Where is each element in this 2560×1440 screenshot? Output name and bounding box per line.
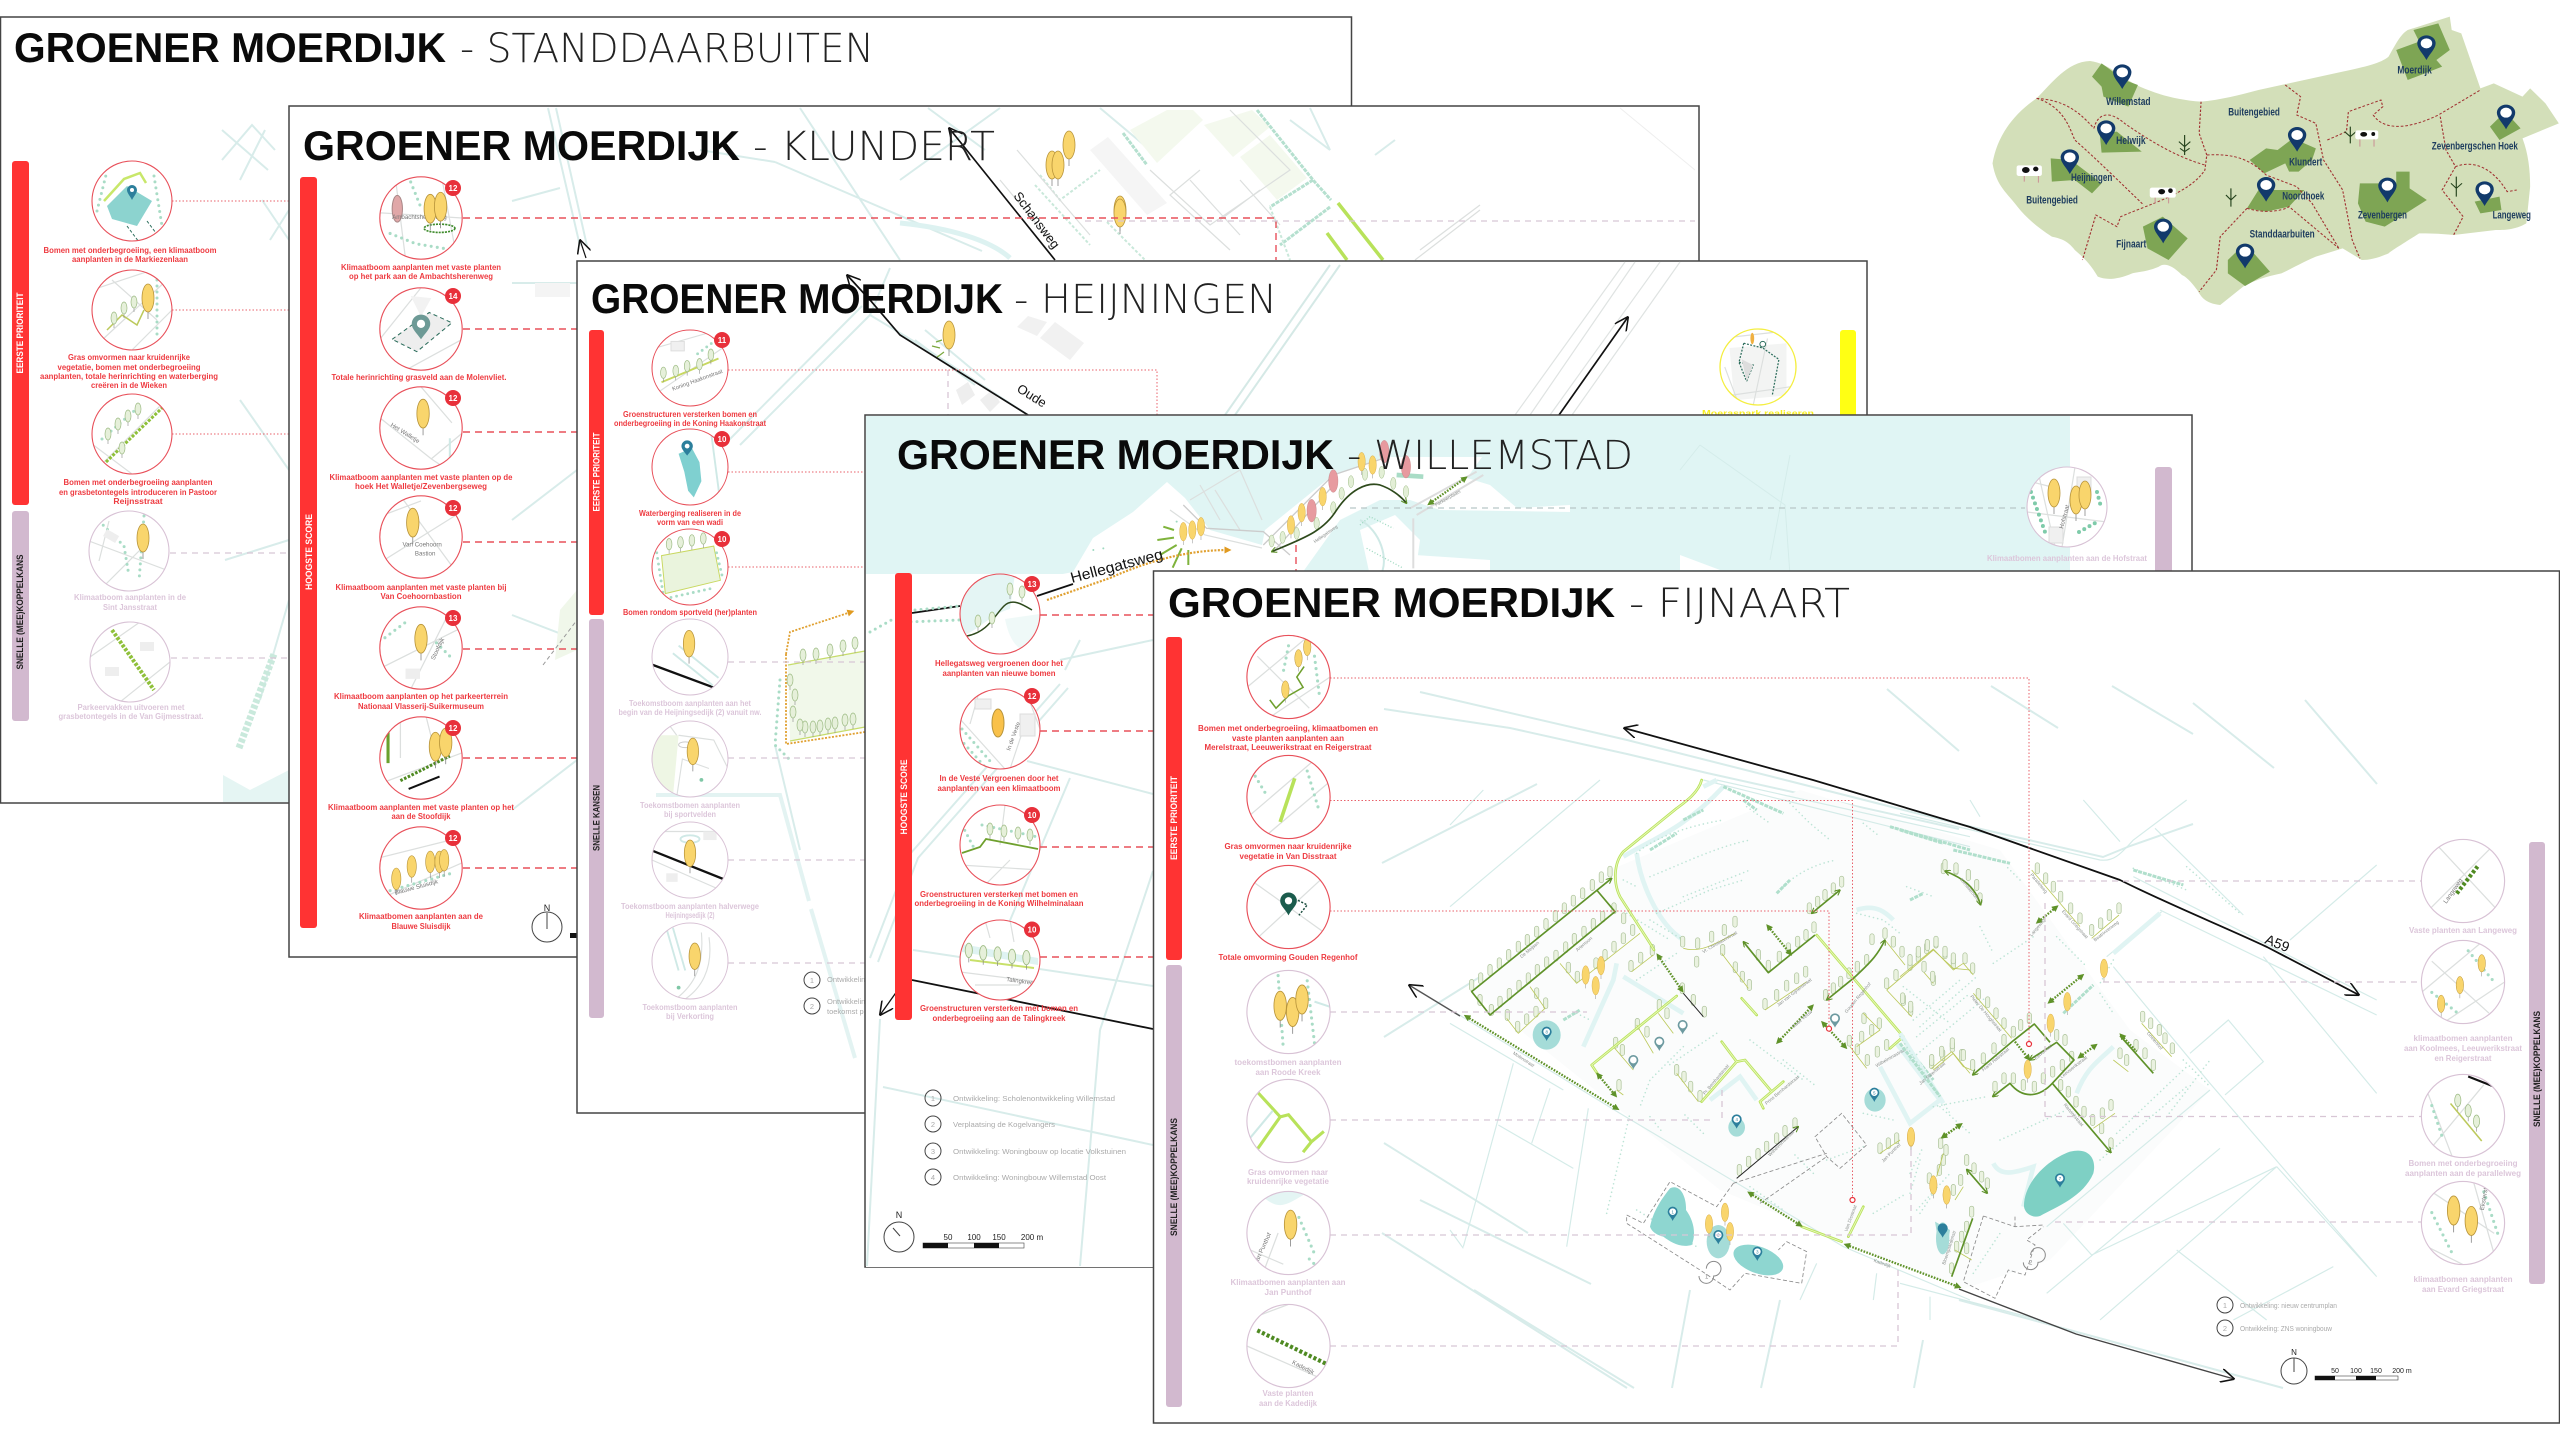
main map west: streets, greenery and trees: 6: [1941, 1228, 1944, 1233]
legend: Willemstad: Ontwikkeling: Woningbouw Willemstad Oost: [953, 1173, 1107, 1182]
legend: Heijningen: toekomst p: [827, 1007, 864, 1016]
callout: Hellegatsweg: 13: [1028, 580, 1037, 589]
main map west: streets, greenery and trees: 1: [1671, 1209, 1674, 1214]
callout: Stoofdijk: Nationaal Vlasserij-Suikermuseum: [358, 701, 484, 711]
callout: kruidenrijke vegetatie: [1247, 1079, 1330, 1186]
callout: Het Walletje: [330, 387, 513, 491]
north arrow: Fijnaart: N: [2291, 1348, 2297, 1357]
callout: de Wieken: vegetatie, bomen met onderbegroeiing: [58, 362, 200, 372]
north arrow: Willemstad: N: [896, 1210, 902, 1220]
arrow: A59 highway: A59: [2263, 931, 2292, 955]
priority bar: hoogste score: [300, 177, 317, 928]
callout: wadi: [639, 429, 741, 527]
place names: Langeweg: [2493, 208, 2531, 221]
main map west: streets, greenery and trees: [1450, 780, 1970, 1300]
priority bar: snelle koppelkansen: [12, 511, 29, 721]
priority bar: eerste prioriteit: [1166, 637, 1182, 960]
callout: Stoofdijk: Klimaatboom aanplanten op het parkeerterrein: [334, 691, 508, 701]
priority bar: yellow: [1840, 330, 1856, 420]
place names: Moerdijk: [2397, 63, 2432, 76]
scale bar: Fijnaart: [2315, 1368, 2412, 1380]
main map west: streets, greenery and trees: Van Disstraat: [1844, 1204, 1858, 1232]
priority bar: eerste prioriteit: [589, 330, 604, 615]
place names: Willemstad: [2106, 95, 2151, 108]
legend: Fijnaart: 2: [2223, 1324, 2227, 1333]
callout: Kadedijk: Kadedijk: [1291, 1359, 1316, 1377]
callout: Langeweg: Langeweg: [2442, 877, 2465, 905]
title: Fijnaart: [1168, 579, 1850, 627]
street map detail: Hellegatsweg route with trees: [1092, 440, 1483, 568]
scale bar: Willemstad: 200 m: [1021, 1233, 1043, 1242]
callout: Hofstraat: [1987, 467, 2147, 563]
callout: Blauwe Sluisdijk: Blauwe Sluisdijk: [394, 878, 440, 897]
place names: Zevenbergen: [2358, 208, 2407, 221]
callout: Talingkreek: [920, 920, 1078, 1023]
leader lines: [170, 201, 289, 658]
priority bar: eerste prioriteit: EERSTE PRIORITEIT: [1169, 776, 1179, 860]
main map east: streets, greenery and trees: [1900, 800, 2377, 1320]
arrow: Oude road: [847, 275, 1049, 415]
background map: Heijningen: [656, 262, 1680, 1058]
callout: Ambachtsherenweg: op het park aan de Ambachtsherenweg: [349, 271, 493, 281]
main map east: streets, greenery and trees: 7: [2059, 1176, 2062, 1181]
callout: Molenvliet: 14: [449, 292, 458, 301]
legend: Willemstad: 2: [931, 1120, 935, 1129]
main map east: streets, greenery and trees: Pieter De Hooghstraat: [1969, 994, 2003, 1033]
background map: Standdaarbuiten: [222, 125, 289, 802]
main map west: streets, greenery and trees: Jan van Gijnenstraat: [1776, 977, 1813, 1007]
callout: Koolmees: [2404, 940, 2522, 1063]
callout: Koolmees: aan Koolmees, Leeuwerikstraat: [2404, 1043, 2522, 1053]
callout: de Wieken: aanplanten, totale herinrichting en waterberging: [40, 371, 218, 381]
callout: yellow priority circle: [1702, 329, 1814, 418]
callout: Koning Haakonstraat: 11: [718, 336, 727, 345]
callout: Van Gijmesstraat: Parkeervakken uitvoeren met: [78, 702, 185, 712]
road with arrow: Talingkreek: [880, 980, 1153, 1029]
callout: Van Coehoorn: 12: [449, 504, 458, 513]
callout: Van Coehoorn: Van Coehoornbastion: [380, 591, 462, 601]
main map east: streets, greenery and trees: Rietvinkstraat: [2063, 1102, 2085, 1128]
legend: Heijningen: Ontwikkeling: [827, 997, 870, 1006]
location pins: [2061, 35, 2515, 268]
callout: Pastoor Reijnsstraat: Reijnsstraat: [113, 496, 163, 506]
callout: Ambachtsherenweg: Ambachtsherenweg: [392, 214, 447, 221]
place names: Standdaarbuiten: [2250, 227, 2315, 240]
leader lines: [463, 218, 1695, 868]
main map west: streets, greenery and trees: Jan Punthof: [1881, 1142, 1902, 1163]
main map east: streets, greenery and trees: Grietenhof: [2146, 1031, 2164, 1051]
callout: In de Veste: In de Veste: [1006, 721, 1022, 752]
legend: Heijningen: 1: [810, 976, 814, 985]
callout: Het Walletje: 12: [449, 394, 458, 403]
leader lines: [1330, 678, 2422, 1346]
callout: yellow priority circle: Moeraspark realiseren: [1702, 408, 1814, 418]
title: Heijningen: GROENER MOERDIJK: [591, 275, 1003, 322]
north arrow: Klundert: [532, 903, 590, 942]
callout: Evard Griegstraat: Eksterstraat: [2479, 1177, 2492, 1211]
callout: Hellegatsweg: [935, 574, 1063, 678]
main map west: streets, greenery and trees: Vr. Christiaanstraat: [1701, 930, 1739, 954]
main map east: streets, greenery and trees: Evard Griegstraat: [2061, 909, 2090, 940]
place names: Klundert: [2289, 155, 2322, 168]
arrow: Schansweg: [949, 128, 1063, 260]
callout: Merelstraat: vaste planten aanplanten aan: [1232, 733, 1344, 743]
priority bar: eerste prioriteit: EERSTE PRIORITEIT: [592, 432, 602, 512]
callout: Talingkreek: 10: [1028, 926, 1037, 934]
legend: Willemstad: Ontwikkeling: Woningbouw op locatie Volkstuinen: [953, 1147, 1126, 1156]
callout: Jan Punthof: Jan Punthof: [1253, 1232, 1273, 1265]
main map west: streets, greenery and trees: 4: [1735, 1117, 1738, 1122]
callout: Heijningsedijk halverwege: Toekomstboom aanplanten halverwege: [621, 901, 759, 911]
north arrow: Fijnaart: [2281, 1348, 2307, 1384]
legend: Heijningen: [804, 972, 870, 1016]
legend: Willemstad: 3: [931, 1147, 935, 1156]
callout: Evard Griegstraat: [2414, 1177, 2512, 1294]
callout: Het Walletje: Klimaatboom aanplanten met vaste planten op de: [330, 472, 513, 482]
callout: Evard Griegstraat: klimaatbomen aanplanten: [2414, 1274, 2512, 1284]
callout: Stoofdijk: [334, 607, 508, 711]
callout: Langeweg: Vaste planten aan Langeweg: [2409, 925, 2517, 935]
panel: Standdaarbuiten: [0, 17, 1352, 803]
callout: Van Coehoorn: Bastion: [415, 551, 436, 558]
legend: Heijningen: Ontwikkeling: [827, 975, 870, 984]
title: Fijnaart: GROENER MOERDIJK: [1168, 579, 1615, 626]
scale bar: Fijnaart: 200 m: [2392, 1368, 2412, 1375]
main map west: streets, greenery and trees: Prins Bernhardstraat: [1764, 1074, 1801, 1106]
callout: Koolmees: en Reigerstraat: [2434, 1053, 2492, 1063]
legend: Fijnaart: Ontwikkeling: nieuw centrumplan: [2240, 1301, 2337, 1310]
callout: Koning Haakonstraat: Groenstructuren versterken bomen en: [623, 409, 757, 419]
callout: Evard Griegstraat: aan Evard Griegstraat: [2422, 1284, 2504, 1294]
main map east: streets, greenery and trees: Klimaatroute: [1959, 877, 1980, 901]
callout: sportveld: [623, 529, 757, 617]
callout: kruidenrijke vegetatie: Gras omvormen naar: [1248, 1167, 1329, 1177]
place names: Noordhoek: [2282, 189, 2324, 202]
legend: Fijnaart: [2217, 1297, 2337, 1336]
scale bar: Fijnaart: 50: [2331, 1368, 2339, 1375]
callout: Langeweg: [2409, 839, 2517, 935]
priority bar: snelle koppelkansen right: [2529, 842, 2545, 1284]
callout: Van Gijmesstraat: grasbetontegels in de Van Gijmesstraat.: [58, 711, 204, 721]
arrow: Klundert north: [580, 240, 586, 258]
callout: Hofstraat: Hofstraat: [2059, 504, 2071, 530]
water: [866, 416, 2070, 1267]
callout: Stoofdijk vaste planten: aan de Stoofdijk: [392, 811, 451, 821]
place names: Buitengebied: [2026, 193, 2078, 206]
legend: Willemstad: 4: [931, 1173, 935, 1182]
main map east: streets, greenery and trees: Parallelweg: [2029, 872, 2049, 894]
priority bar: snelle koppelkansen left: [1166, 965, 1182, 1407]
callout: sportvelden: bij sportvelden: [664, 809, 716, 819]
main map east: streets, greenery and trees: Bloemgaardenstr: [1941, 1230, 1957, 1265]
place names: Fijnaart: [2116, 237, 2146, 250]
main map west: streets, greenery and trees: Anemoon: [1575, 936, 1594, 952]
callout: Koning Haakonstraat: onderbegroeiing in de Koning Haakonstraat: [614, 418, 766, 428]
arrow: Schansweg: Schansweg: [1011, 189, 1063, 251]
callout: Hellegatsweg: Hellegatsweg vergroenen door het: [935, 658, 1063, 668]
main map west: streets, greenery and trees: Oude Veluw: [1791, 1009, 1814, 1029]
main map west: streets, greenery and trees: Gouden Regenhof: [1844, 981, 1872, 1014]
arrow: north-east road: [1559, 317, 1628, 415]
callout: Heijningsedijk halverwege: Heijningsedijk (2): [666, 910, 715, 920]
callout: Koolmees: klimaatbomen aanplanten: [2414, 1033, 2512, 1043]
title: Willemstad: [897, 431, 1633, 479]
callout: Sint Jansstraat: [74, 511, 186, 612]
main map west: streets, greenery and trees: Kadedijk: [1873, 1258, 1892, 1269]
priority bar: snelle koppelkansen left: SNELLE (MEE)KOPPELKANS: [1169, 1118, 1179, 1236]
callout: wadi: 10: [718, 435, 727, 444]
callout: Kadedijk: Vaste planten: [1262, 1388, 1314, 1398]
panel: Heijningen: [577, 261, 1867, 1113]
arrow: Oude road: Oude: [1014, 381, 1049, 410]
callout: Markiezenlaan: Bomen met onderbegroeiing, een klimaatboom: [44, 245, 217, 255]
callout: Merelstraat: Bomen met onderbegroeiing, klimaatbomen en: [1198, 723, 1378, 733]
callout: Kadedijk: aan de Kadedijk: [1259, 1398, 1317, 1408]
title: Willemstad: - WILLEMSTAD: [1347, 433, 1633, 479]
scale bar: Willemstad: [923, 1233, 1043, 1248]
callout: Talingkreek: onderbegroeiing aan de Talingkreek: [932, 1013, 1066, 1023]
callout: de Wieken: creëren in de Wieken: [91, 380, 167, 390]
main map west: streets, greenery and trees: Wilhelminastraat: [1767, 1129, 1796, 1157]
arrow: A59 highway: [1624, 728, 2359, 995]
main map east: streets, greenery and trees: 2: [2029, 1260, 2033, 1266]
callout: Van Coehoorn: Klimaatboom aanplanten met vaste planten bij: [336, 582, 506, 592]
legend: Willemstad: Ontwikkeling: Scholenontwikkeling Willemstad: [953, 1094, 1115, 1103]
place names: [2026, 63, 2531, 250]
callout: Kadedijk: [1247, 1304, 1330, 1408]
callout: Stoofdijk vaste planten: [328, 717, 514, 821]
boundaries: [2037, 85, 2517, 292]
callout: Van Disstraat: Gras omvormen naar kruidenrijke: [1224, 841, 1352, 851]
scale bar: Willemstad: 50: [944, 1233, 953, 1242]
priority bar: hoogste score: [895, 573, 912, 1020]
scale bar: Fijnaart: 100: [2350, 1368, 2362, 1375]
legend: Willemstad: Verplaatsing de Kogelvangers: [953, 1120, 1055, 1129]
callout: kruidenrijke vegetatie: kruidenrijke vegetatie: [1247, 1176, 1329, 1186]
callout: Koning Wilhelminalaan: Groenstructuren versterken met bomen en: [920, 889, 1078, 899]
main map east: streets, greenery and trees: Frans Halsstraat: [1981, 1046, 2011, 1072]
main map west: streets, greenery and trees: Pr. Bernhardstraat: [1702, 1063, 1731, 1096]
main map east: streets, greenery and trees: Leeuwerikstraat: [2059, 1055, 2089, 1079]
priority bar: hoogste score: HOOGSTE SCORE: [304, 514, 314, 590]
arrow: south-east road: [1959, 1289, 2234, 1379]
callout: Koning Wilhelminalaan: 10: [1028, 811, 1037, 820]
callout: sportvelden: [640, 721, 740, 819]
label: Hellegatsweg: [912, 546, 1228, 613]
street map detail: Hellegatsweg route with trees: Hellegatsweg: [1313, 524, 1339, 544]
callout: parallelweg: [2405, 1074, 2521, 1178]
callout: Roode Kreek: [1234, 970, 1342, 1077]
callout: Van Disstraat: [1224, 755, 1352, 861]
north arrow: Klundert: N: [544, 903, 550, 913]
callout: Blauwe Sluisdijk: 12: [449, 834, 458, 843]
callout: Heijningsedijk halverwege: [621, 822, 759, 920]
title: Klundert: [303, 122, 995, 170]
title: Standdaarbuiten: - STANDDAARBUITEN: [460, 26, 874, 72]
main map east: streets, greenery and trees: Jan Steenstraat: [1918, 1061, 1947, 1086]
callout: Jan Punthof: [1231, 1190, 1345, 1295]
callout: Stoofdijk vaste planten: Klimaatboom aanplanten met vaste planten op het: [328, 802, 514, 812]
callout: Heijningsedijk begin: [618, 619, 762, 717]
panel: Fijnaart: [1154, 571, 2560, 1423]
callout: Ambachtsherenweg: Klimaatboom aanplanten met vaste planten: [341, 262, 501, 272]
scale bar: Fijnaart: 150: [2370, 1368, 2382, 1375]
callout: Roode Kreek: aan Roode Kreek: [1256, 1067, 1321, 1077]
callout: Stoofdijk vaste planten: 12: [449, 724, 458, 733]
callout: Heijningsedijk begin: Toekomstboom aanplanten aan het: [629, 698, 751, 708]
callout: Van Disstraat: vegetatie in Van Disstraat: [1240, 851, 1337, 861]
place names: Heijningen: [2071, 171, 2112, 184]
callout: Molenvliet: [332, 288, 506, 382]
town area tint: [1470, 790, 2210, 1290]
title: Standdaarbuiten: [14, 24, 874, 72]
callout: Van Coehoorn: Van Coehoorn: [402, 541, 442, 548]
callout: parallelweg: aanplanten aan de parallelweg: [2405, 1168, 2521, 1178]
callout: In de Veste: [938, 688, 1061, 793]
callout: Blauwe Sluisdijk: [359, 827, 483, 931]
legend: Heijningen: 2: [810, 1002, 814, 1011]
place names: Helwijk: [2116, 134, 2146, 147]
callout: Gouden Regenhof: Totale omvorming Gouden Regenhof: [1218, 952, 1358, 962]
callout: Pastoor Reijnsstraat: Bomen met onderbegroeiing aanplanten: [64, 477, 212, 487]
callout: Markiezenlaan: [44, 161, 217, 264]
legend: Fijnaart: Ontwikkeling: ZNS woningbouw: [2240, 1324, 2333, 1333]
callout: Koning Wilhelminalaan: [914, 805, 1084, 908]
north arrow: Willemstad: [884, 1210, 914, 1252]
callout: Pastoor Reijnsstraat: [59, 394, 218, 506]
village patches: [2051, 23, 2521, 286]
background map: Willemstad: [867, 445, 1790, 1266]
title: Heijningen: [591, 275, 1277, 323]
callout: Verkorting: Toekomstboom aanplanten: [642, 1002, 738, 1012]
callout: Van Coehoorn: [336, 496, 506, 601]
title: Fijnaart: - FIJNAART: [1629, 581, 1850, 627]
callout: Blauwe Sluisdijk: Klimaatbomen aanplanten aan de: [359, 911, 483, 921]
callout: Koning Wilhelminalaan: onderbegroeiing in de Koning Wilhelminalaan: [914, 898, 1084, 908]
leader lines: [1040, 508, 2025, 957]
callout: Verkorting: [642, 923, 738, 1021]
callout: de Wieken: Gras omvormen naar kruidenrijke: [68, 352, 190, 362]
scale bar: Willemstad: 150: [992, 1233, 1006, 1242]
main map west: streets, greenery and trees: De Meijsen: [1519, 940, 1540, 959]
callout: Verkorting: bij Verkorting: [666, 1011, 714, 1021]
callout: sportveld: Bomen rondom sportveld (her)planten: [623, 607, 757, 617]
arrow: west road: [1409, 985, 1460, 1016]
callout: Stoofdijk: Stoofdijk: [430, 636, 447, 661]
callout: In de Veste: In de Veste Vergroenen door het: [940, 773, 1059, 783]
callout: Molenvliet: Totale herinrichting grasveld aan de Molenvliet.: [332, 372, 506, 382]
priority bar: snelle kansen: [589, 619, 604, 1018]
priority bar: lilac Willemstad: [2155, 467, 2172, 577]
panel: Willemstad: [865, 415, 2192, 1267]
callout: Ambachtsherenweg: 12: [449, 184, 458, 193]
priority bar: hoogste score: HOOGSTE SCORE: [899, 760, 909, 834]
legend: Willemstad: [925, 1090, 1126, 1185]
main map west: streets, greenery and trees: 3: [1756, 1249, 1759, 1254]
callout: Koning Haakonstraat: Koning Haakonstraat: [672, 369, 724, 393]
main map west: streets, greenery and trees: 2: [1717, 1233, 1720, 1238]
callout: Koning Haakonstraat: [614, 330, 766, 428]
main map west: streets, greenery and trees: Molenstraat: [1512, 1051, 1536, 1068]
label: Hellegatsweg: Hellegatsweg: [1069, 546, 1165, 587]
main map west: streets, greenery and trees: 5: [1873, 1090, 1876, 1095]
callout: Gouden Regenhof: [1218, 865, 1358, 962]
callout: sportvelden: Toekomstbomen aanplanten: [640, 800, 740, 810]
background map: Klundert: [512, 108, 1695, 810]
callout: Hellegatsweg: aanplanten van nieuwe bomen: [942, 668, 1056, 678]
priority bar: snelle koppelkansen right: SNELLE (MEE)KOPPELKANS: [2532, 1011, 2542, 1127]
main map east: streets, greenery and trees: Beatrixvenweg: [2093, 919, 2120, 942]
main map west: streets, greenery and trees: 8: [1545, 1029, 1548, 1034]
callout: parallelweg: Bomen met onderbegroeiing: [2408, 1158, 2518, 1168]
callout: Jan Punthof: Klimaatbomen aanplanten aan: [1230, 1277, 1346, 1287]
street map detail: Hellegatsweg route with trees: Parkeerplaats: [1434, 488, 1462, 508]
main map west: streets, greenery and trees: 1: [1705, 1274, 1709, 1280]
callout: Pastoor Reijnsstraat: en grasbetontegels introduceren in Pastoor: [59, 487, 218, 497]
callout: Sint Jansstraat: Sint Jansstraat: [103, 602, 157, 612]
callout: de Wieken: [40, 270, 218, 390]
title: Heijningen: - HEIJNINGEN: [1014, 277, 1277, 323]
title: Klundert: - KLUNDERT: [753, 124, 995, 170]
legend: Fijnaart: 1: [2223, 1301, 2227, 1310]
callout: Het Walletje: Het Walletje: [389, 422, 421, 445]
place names: Buitengebied: [2228, 105, 2280, 118]
callout: Van Gijmesstraat: [58, 622, 204, 721]
callout: Markiezenlaan: aanplanten in de Markiezenlaan: [72, 254, 188, 264]
callout: Roode Kreek: toekomstbomen aanplanten: [1234, 1057, 1342, 1067]
callout: Heijningsedijk begin: begin van de Heijningsedijk (2) vanuit nw.: [618, 707, 762, 717]
main map east: streets, greenery and trees: Langeweg: [2029, 917, 2047, 937]
callout: wadi: Waterberging realiseren in de: [639, 508, 741, 518]
callout: Merelstraat: Merelstraat, Leeuwerikstraat en Reigerstraat: [1204, 742, 1372, 752]
callout: In de Veste: 12: [1028, 692, 1037, 701]
callout: Ambachtsherenweg: [341, 177, 501, 281]
priority bar: snelle kansen: SNELLE KANSEN: [592, 785, 602, 851]
map: municipality Moerdijk overview: [1993, 17, 2559, 305]
callout: Merelstraat: [1198, 635, 1378, 752]
callout: Sint Jansstraat: Klimaatboom aanplanten in de: [74, 592, 186, 602]
scale bar: Willemstad: 100: [967, 1233, 981, 1242]
legend: Willemstad: 1: [931, 1094, 935, 1103]
callout: wadi: vorm van een wadi: [657, 517, 723, 527]
callout: Blauwe Sluisdijk: Blauwe Sluisdijk: [392, 921, 451, 931]
panel: Klundert: [289, 106, 1699, 957]
priority bar: snelle koppelkansen: SNELLE (MEE)KOPPELKANS: [15, 554, 25, 670]
outer fields and roads: [1382, 686, 2377, 1388]
callout: In de Veste: aanplanten van een klimaatboom: [938, 783, 1061, 793]
title: Klundert: GROENER MOERDIJK: [303, 122, 740, 169]
main map east: streets, greenery and trees: Kerkstraat: [2033, 1043, 2053, 1061]
main map west: streets, greenery and trees: Wilhelminastraat: [1875, 1046, 1908, 1068]
priority bar: eerste prioriteit: [12, 161, 29, 505]
callout: sportveld: 10: [718, 535, 727, 544]
title: Willemstad: GROENER MOERDIJK: [897, 431, 1334, 478]
callout: Talingkreek: Talingkreek: [1006, 977, 1038, 987]
callout: Jan Punthof: Jan Punthof: [1264, 1287, 1312, 1297]
callout: Het Walletje: hoek Het Walletje/Zevenbergseweg: [355, 481, 487, 491]
title: Standdaarbuiten: GROENER MOERDIJK: [14, 24, 446, 71]
map outline: [1993, 17, 2559, 305]
callout: Hofstraat: Klimaatbomen aanplanten aan de Hofstraat: [1987, 553, 2147, 563]
priority bar: eerste prioriteit: EERSTE PRIORITEIT: [15, 292, 25, 374]
leader lines: [728, 370, 1157, 963]
callout: Talingkreek: Groenstructuren versterken met bomen en: [920, 1003, 1078, 1013]
callout: Stoofdijk: 13: [449, 614, 458, 623]
icons: trees and cows: [2017, 127, 2462, 207]
shoreline detail: [870, 606, 960, 632]
